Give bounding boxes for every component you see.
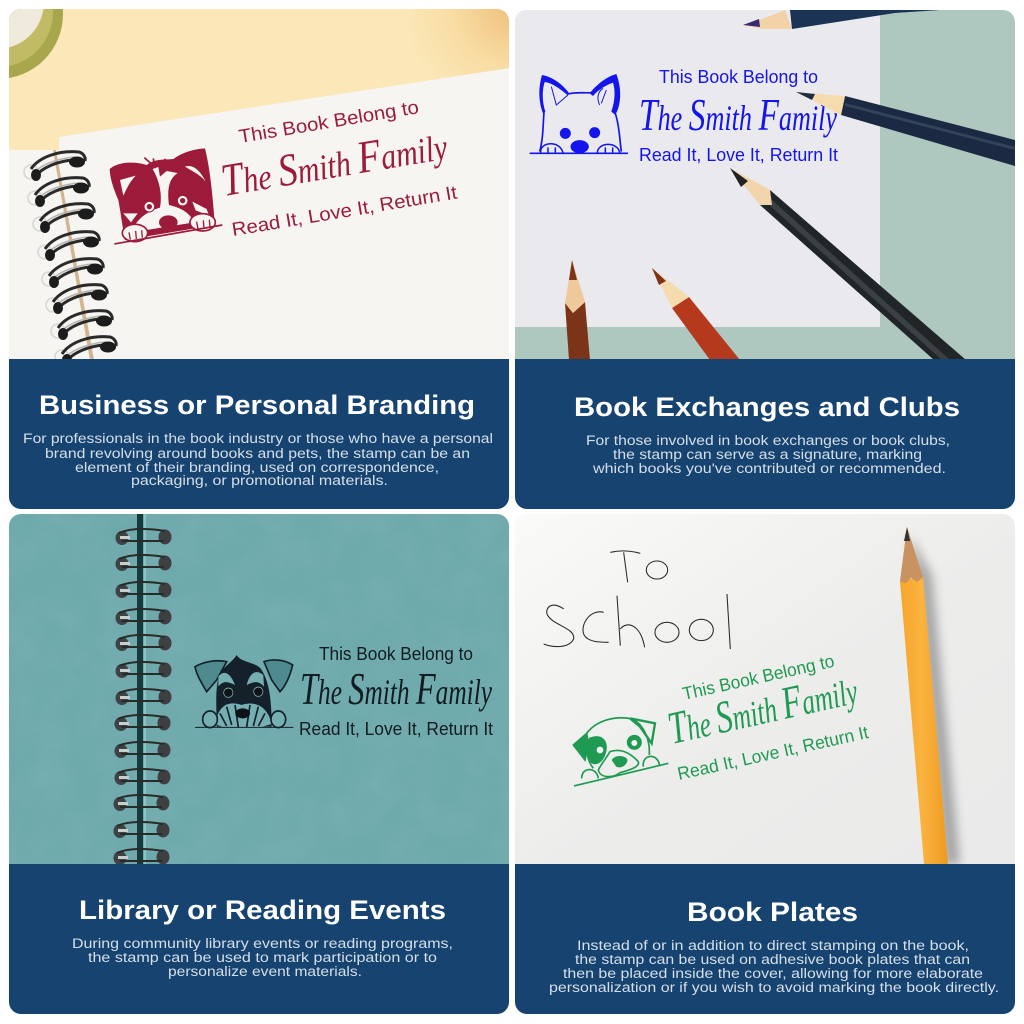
stamp text: black: This Book Belong to [319, 644, 473, 664]
body text [549, 938, 999, 996]
stamp text: green: This Book Belong to [681, 651, 836, 704]
caption panel [515, 864, 1015, 1014]
icon: navy pencil right [796, 92, 1015, 166]
photo: white page with handwriting, pencil and green stamp [515, 514, 1015, 864]
handwriting: To School [544, 551, 730, 649]
caption panel [515, 359, 1015, 509]
panel: book plates [515, 514, 1015, 1014]
photo: paper and coloured pencils with blue stamp [515, 10, 1015, 360]
icon: green tape roll [9, 9, 63, 78]
photo: notebook on yellow paper with red stamp [0, 0, 510, 366]
body text: the stamp can be used on adhesive book plates that can [575, 952, 970, 968]
body text: which books you've contributed or recommended. [592, 461, 946, 477]
stamp text: red: Read It, Love It, Return It [230, 182, 459, 241]
stamp text: blue: This Book Belong to [659, 67, 818, 87]
stamp text: blue [639, 67, 838, 165]
body text: For professionals in the book industry or those who have a personal [23, 431, 493, 447]
icon: red pencil [652, 268, 740, 360]
body text: Instead of or in addition to direct stamping on the book, [577, 938, 969, 954]
icon: red stamped dog [110, 148, 222, 244]
stamp text: red: This Book Belong to [237, 97, 420, 148]
body text: personalize event materials. [168, 964, 362, 980]
caption panel [9, 359, 509, 509]
panel: library or reading events [9, 514, 509, 1014]
body text: personalization or if you wish to avoid marking the book directly. [549, 980, 999, 996]
icon: top navy pencil [743, 10, 940, 29]
heading: Library or Reading Events [79, 895, 446, 925]
icon: black pencil centre [730, 168, 966, 360]
body text: packaging, or promotional materials. [131, 473, 388, 489]
icon: blue stamped dog [530, 74, 628, 153]
stamp text: red: The Smith Family [217, 118, 451, 206]
heading: Business or Personal Branding [39, 390, 475, 420]
body text: During community library events or reading programs, [72, 936, 453, 952]
spiral binding rings [24, 152, 116, 366]
panel: book exchanges and clubs [515, 10, 1015, 509]
body text: the stamp can serve as a signature, marking [613, 447, 922, 463]
photo: teal notebook with black stamp [9, 514, 509, 865]
stamp text: black [299, 644, 493, 739]
body text: brand revolving around books and pets, the stamp can be an [45, 446, 470, 462]
heading: Book Exchanges and Clubs [574, 392, 960, 422]
caption panel [9, 864, 509, 1014]
icon: yellow pencil [900, 527, 960, 864]
stamp text: black: Read It, Love It, Return It [299, 719, 493, 739]
icon: black stamped dog [195, 655, 293, 728]
body text [586, 433, 950, 477]
body text: then be placed inside the cover, allowing for more elaborate [563, 966, 983, 982]
panel: business or personal branding [0, 0, 510, 509]
body text: element of their branding, used on correspondence, [75, 460, 439, 476]
icon: green stamped dog [573, 718, 668, 786]
stamp text: green: Read It, Love It, Return It [676, 722, 870, 784]
body text [23, 431, 493, 489]
heading: Book Plates [687, 897, 858, 927]
stamp text: red [222, 103, 458, 236]
body text: For those involved in book exchanges or book clubs, [586, 433, 950, 449]
body text [72, 936, 453, 980]
stamp text: blue: The Smith Family [639, 89, 837, 140]
body text: the stamp can be used to mark participation or to [88, 950, 437, 966]
stamp text: green: The Smith Family [663, 662, 862, 754]
stamp text: black: The Smith Family [300, 663, 492, 714]
stamp text: blue: Read It, Love It, Return It [639, 145, 838, 165]
stamp text: green [668, 658, 870, 780]
icon: brown pencil [565, 260, 590, 360]
spiral binding rings [114, 529, 172, 865]
